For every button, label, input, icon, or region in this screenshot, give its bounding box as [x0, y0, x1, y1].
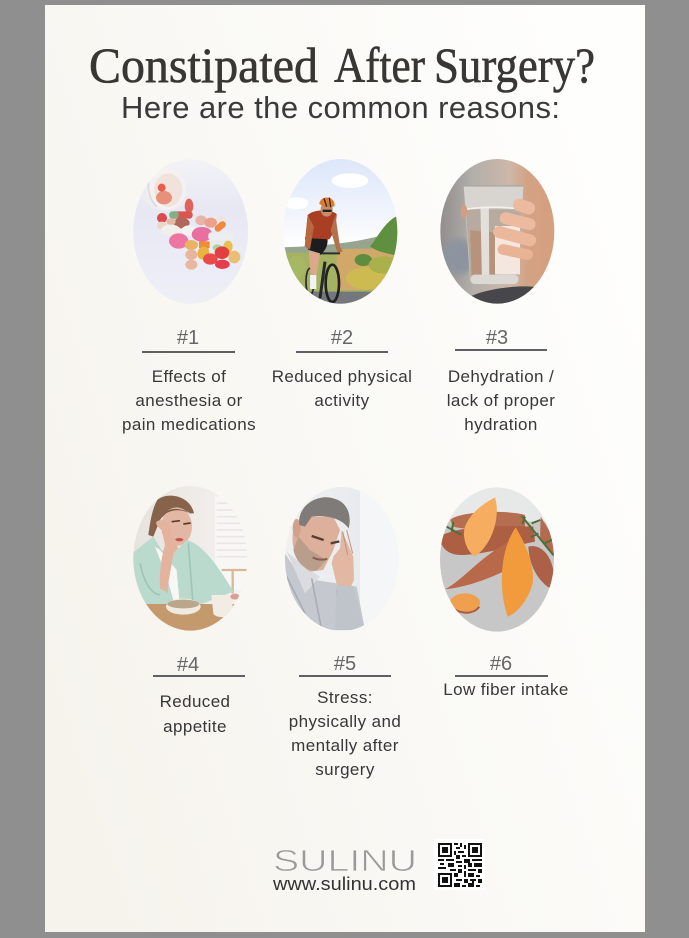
title — [89, 37, 595, 93]
reason 2: reduced activity — [272, 157, 412, 410]
subtitle: Here are the common reasons: — [121, 90, 560, 125]
description: Dehydration / — [448, 367, 554, 386]
reason 4: reduced appetite — [130, 483, 250, 736]
number: #3 — [486, 327, 508, 349]
QR code — [434, 839, 485, 890]
number: #2 — [331, 327, 353, 349]
description: activity — [314, 391, 370, 410]
footer brand — [272, 843, 417, 894]
reason 6: low fiber — [437, 485, 569, 699]
photo: cyclist — [280, 157, 400, 307]
number: #4 — [177, 654, 199, 676]
reason 1: anesthesia or medications — [122, 157, 256, 434]
photo: sweet potatoes — [437, 485, 558, 635]
logo wordmark: SULINU — [273, 843, 417, 878]
description: Stress: — [317, 688, 373, 707]
description: pain medications — [122, 415, 256, 434]
description: lack of proper — [447, 391, 555, 410]
description: Reduced physical — [272, 367, 412, 386]
title: Surgery? — [434, 37, 595, 93]
number: #1 — [177, 327, 199, 349]
description: surgery — [315, 760, 375, 779]
description: Low fiber intake — [443, 680, 569, 699]
description: physically and — [289, 712, 401, 731]
photo: stressed man — [283, 485, 400, 633]
photo: woman at table — [133, 486, 247, 631]
reason 3: dehydration — [437, 157, 558, 434]
title: After — [334, 37, 425, 93]
description: Reduced — [160, 692, 230, 711]
photo: spilled pills — [134, 164, 248, 304]
reason 5: stress — [283, 485, 401, 779]
photo: glass of water — [437, 157, 558, 307]
number: #6 — [490, 653, 512, 675]
description: appetite — [163, 717, 227, 736]
title: Constipated — [89, 37, 318, 93]
cyclist — [305, 197, 343, 302]
website: www.sulinu.com — [272, 874, 416, 894]
description: mentally after — [291, 736, 399, 755]
description: Effects of — [152, 367, 226, 386]
description: hydration — [464, 415, 538, 434]
number: #5 — [334, 653, 356, 675]
description: anesthesia or — [135, 391, 243, 410]
